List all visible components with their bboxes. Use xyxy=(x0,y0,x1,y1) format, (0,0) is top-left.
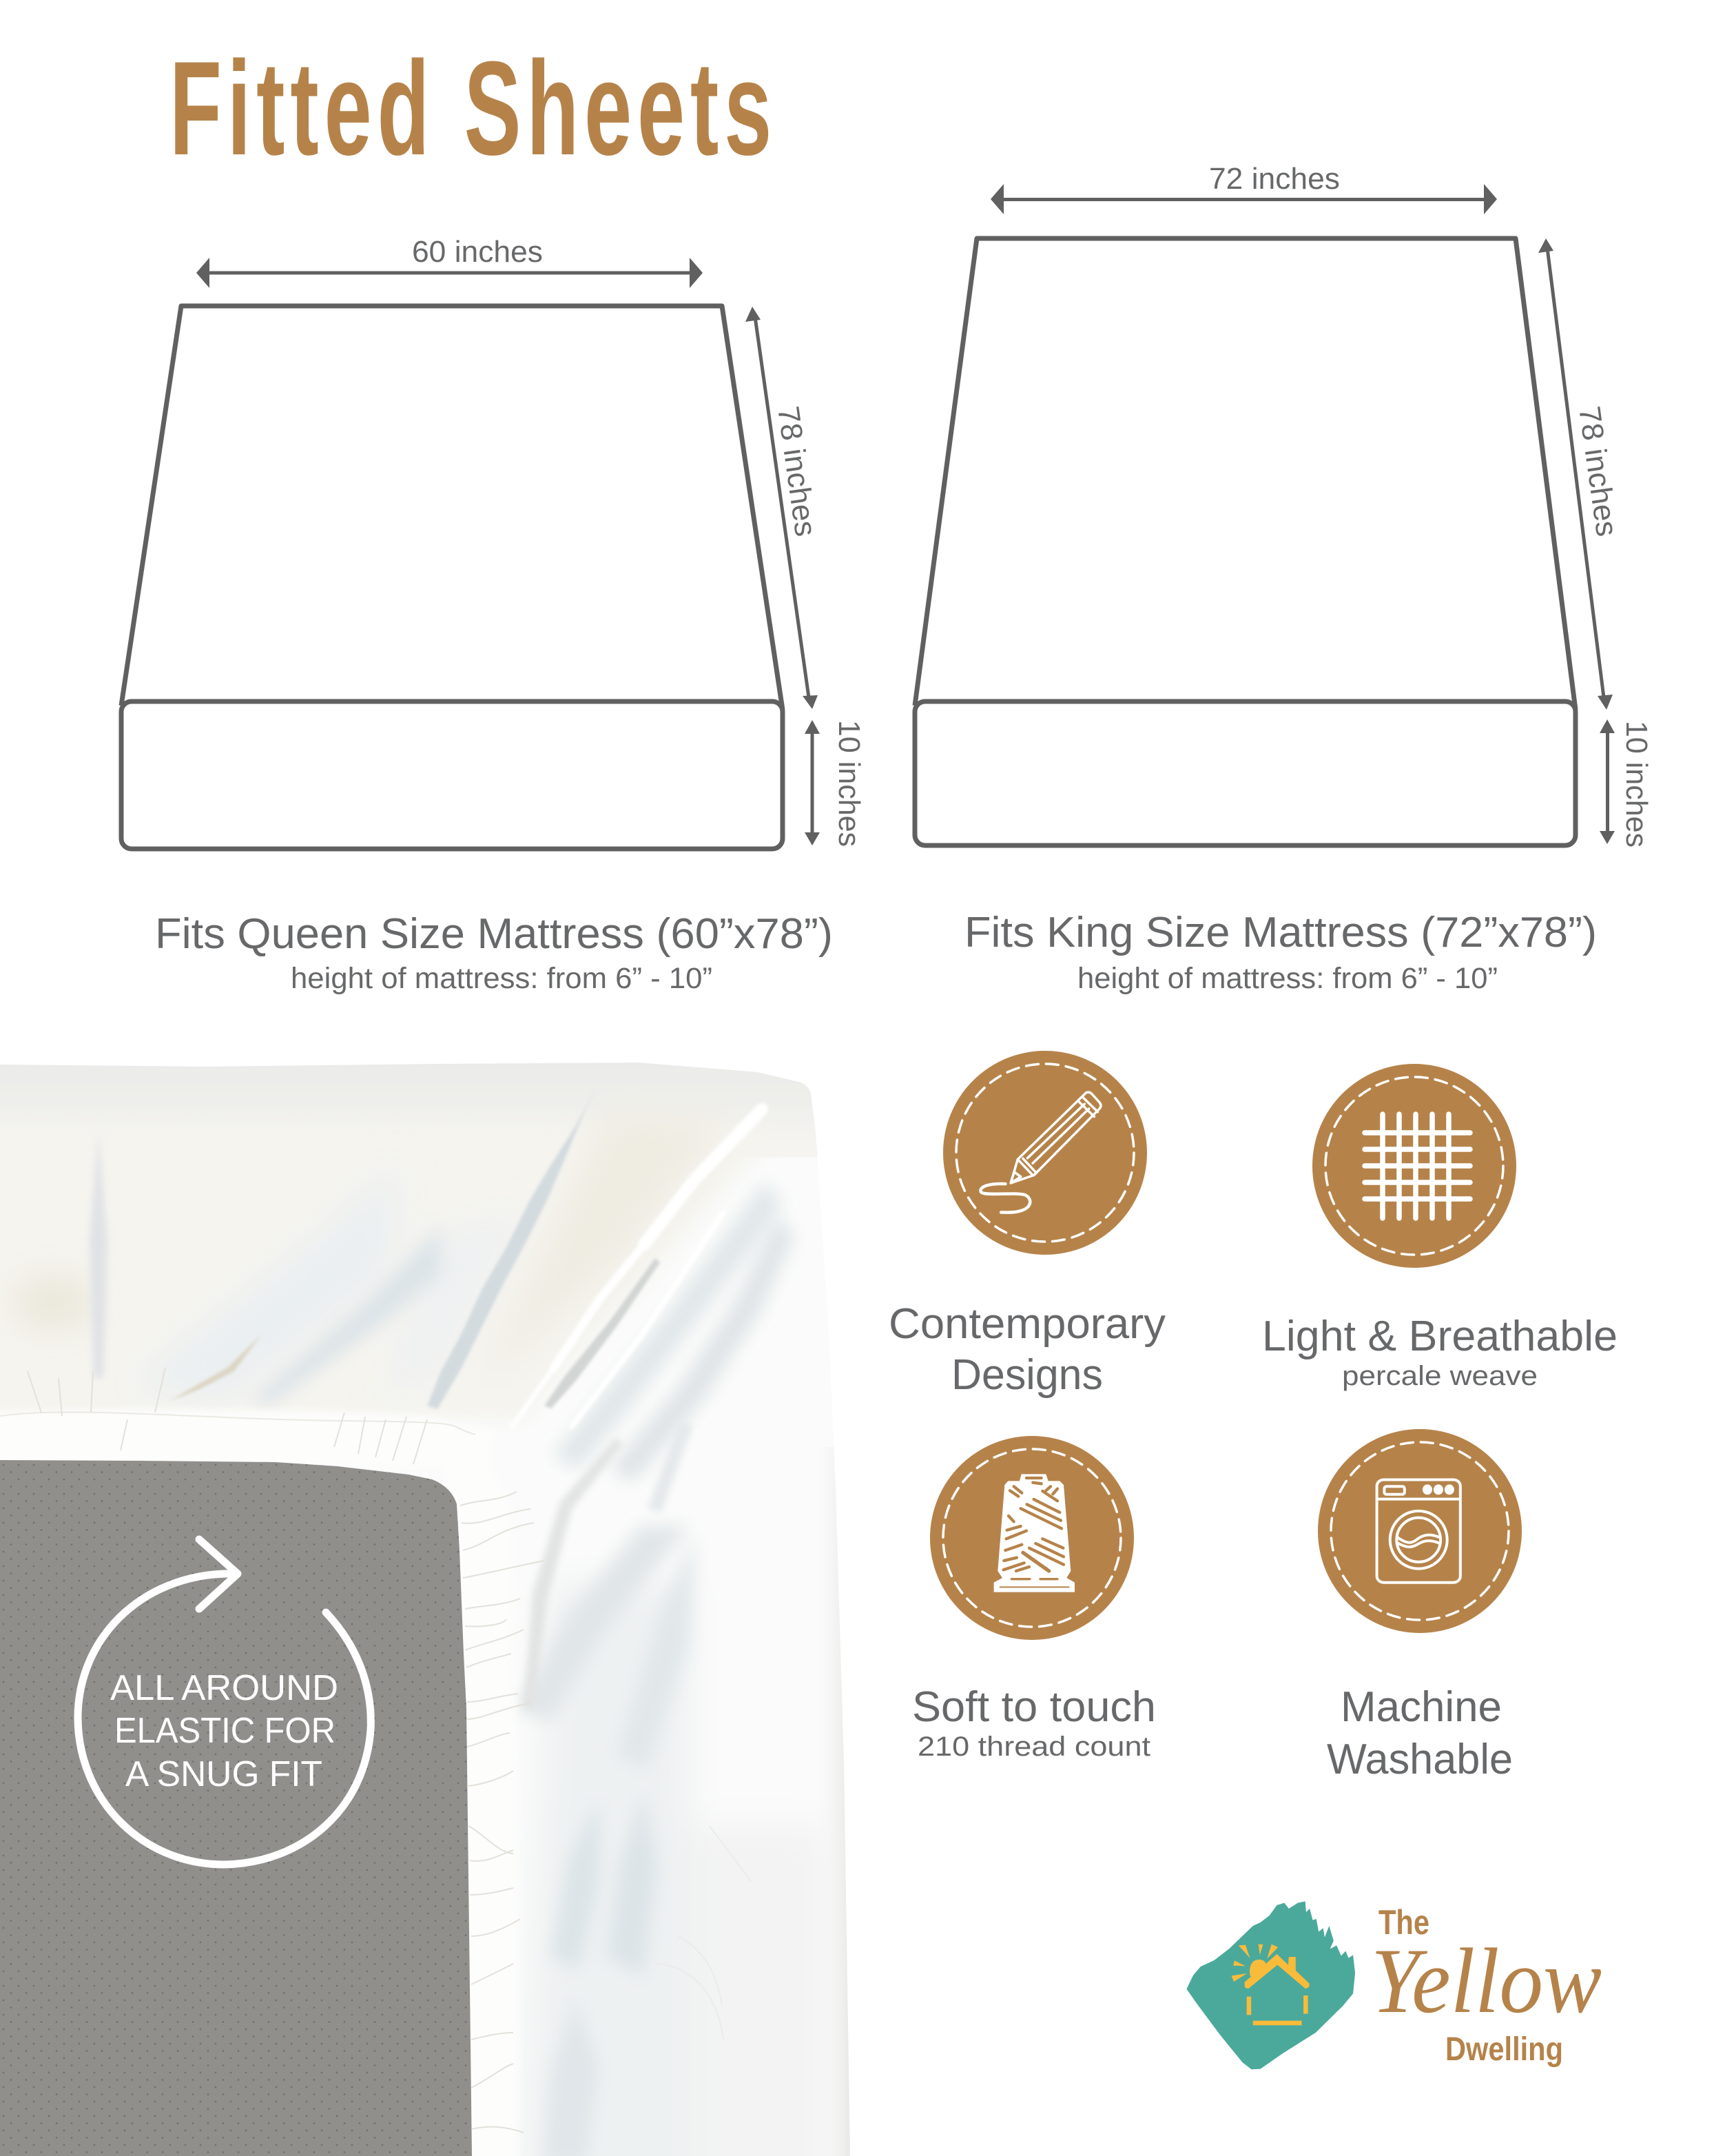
logo: The Yellow Dwelling: Dwelling xyxy=(1445,2031,1563,2068)
queen height label: 10 inches xyxy=(832,720,866,847)
feature: light and breathable xyxy=(1262,1313,1618,1391)
sheet fabric xyxy=(0,1061,854,2156)
logo: The Yellow Dwelling xyxy=(1187,1901,1602,2069)
fabric folds xyxy=(253,1182,794,2156)
fabric shading xyxy=(15,1120,708,2156)
arrow: king width xyxy=(991,184,1497,214)
feature: machine washable xyxy=(1327,1683,1513,1783)
queen caption xyxy=(155,910,833,995)
queen caption: Fits Queen Size Mattress (60”x78”) xyxy=(155,910,833,958)
feature: machine washable: Machine xyxy=(1341,1683,1502,1731)
panel: queen diagram xyxy=(121,235,866,849)
queen caption: height of mattress: from 6” - 10” xyxy=(291,962,712,995)
king height label: 10 inches xyxy=(1620,721,1653,848)
title: Fitted Sheets xyxy=(169,34,772,183)
queen width label: 60 inches xyxy=(412,235,543,269)
arrow: queen height xyxy=(805,720,820,845)
icon: pencil badge xyxy=(943,1051,1147,1255)
icon: thread spool badge xyxy=(930,1436,1134,1640)
elastic callout text: A SNUG FIT xyxy=(125,1754,322,1794)
feature: soft to touch: 210 thread count xyxy=(918,1732,1150,1762)
feature: contemporary designs: Designs xyxy=(951,1351,1103,1399)
feature: contemporary designs: Contemporary xyxy=(889,1300,1166,1348)
logo brush mark xyxy=(1187,1901,1355,2069)
feature: contemporary designs xyxy=(889,1300,1166,1399)
king mattress outline xyxy=(915,238,1576,845)
logo house icon xyxy=(1232,1944,1310,2025)
king width label: 72 inches xyxy=(1209,162,1340,196)
logo: The Yellow Dwelling: Yellow xyxy=(1371,1930,1602,2033)
queen mattress outline xyxy=(121,306,783,849)
elastic callout text: ALL AROUND xyxy=(110,1668,338,1708)
feature: soft to touch: Soft to touch xyxy=(912,1683,1156,1731)
queen length label: 78 inches xyxy=(771,404,823,539)
grey underside pad xyxy=(0,1460,472,2156)
arrow: queen length xyxy=(745,307,818,709)
feature: machine washable: Washable xyxy=(1327,1736,1513,1783)
right panel wrinkles xyxy=(700,1826,751,2040)
arrow: king length xyxy=(1538,238,1613,710)
feature: light and breathable: percale weave xyxy=(1342,1361,1538,1391)
king caption: Fits King Size Mattress (72”x78”) xyxy=(964,909,1597,956)
elastic callout text: ELASTIC FOR xyxy=(114,1711,335,1751)
logo wordmark: The xyxy=(1378,1903,1429,1942)
panel: fitted sheet photo xyxy=(0,1061,854,2156)
arrow: circular elastic arrow xyxy=(78,1539,371,1865)
feature: light and breathable: Light & Breathable xyxy=(1262,1313,1618,1360)
king length label: 78 inches xyxy=(1572,404,1624,539)
arrow: queen width xyxy=(196,258,703,288)
feature: soft to touch xyxy=(912,1683,1156,1762)
icon: weave badge xyxy=(1312,1064,1516,1268)
king caption xyxy=(964,909,1597,995)
icon: washing machine badge xyxy=(1318,1429,1522,1633)
arrow: king height xyxy=(1600,719,1615,844)
king caption: height of mattress: from 6” - 10” xyxy=(1077,962,1498,995)
elastic band xyxy=(0,1368,544,2156)
fabric highlights xyxy=(512,1109,762,1427)
panel: king diagram xyxy=(915,162,1653,848)
elastic callout text xyxy=(110,1668,338,1794)
